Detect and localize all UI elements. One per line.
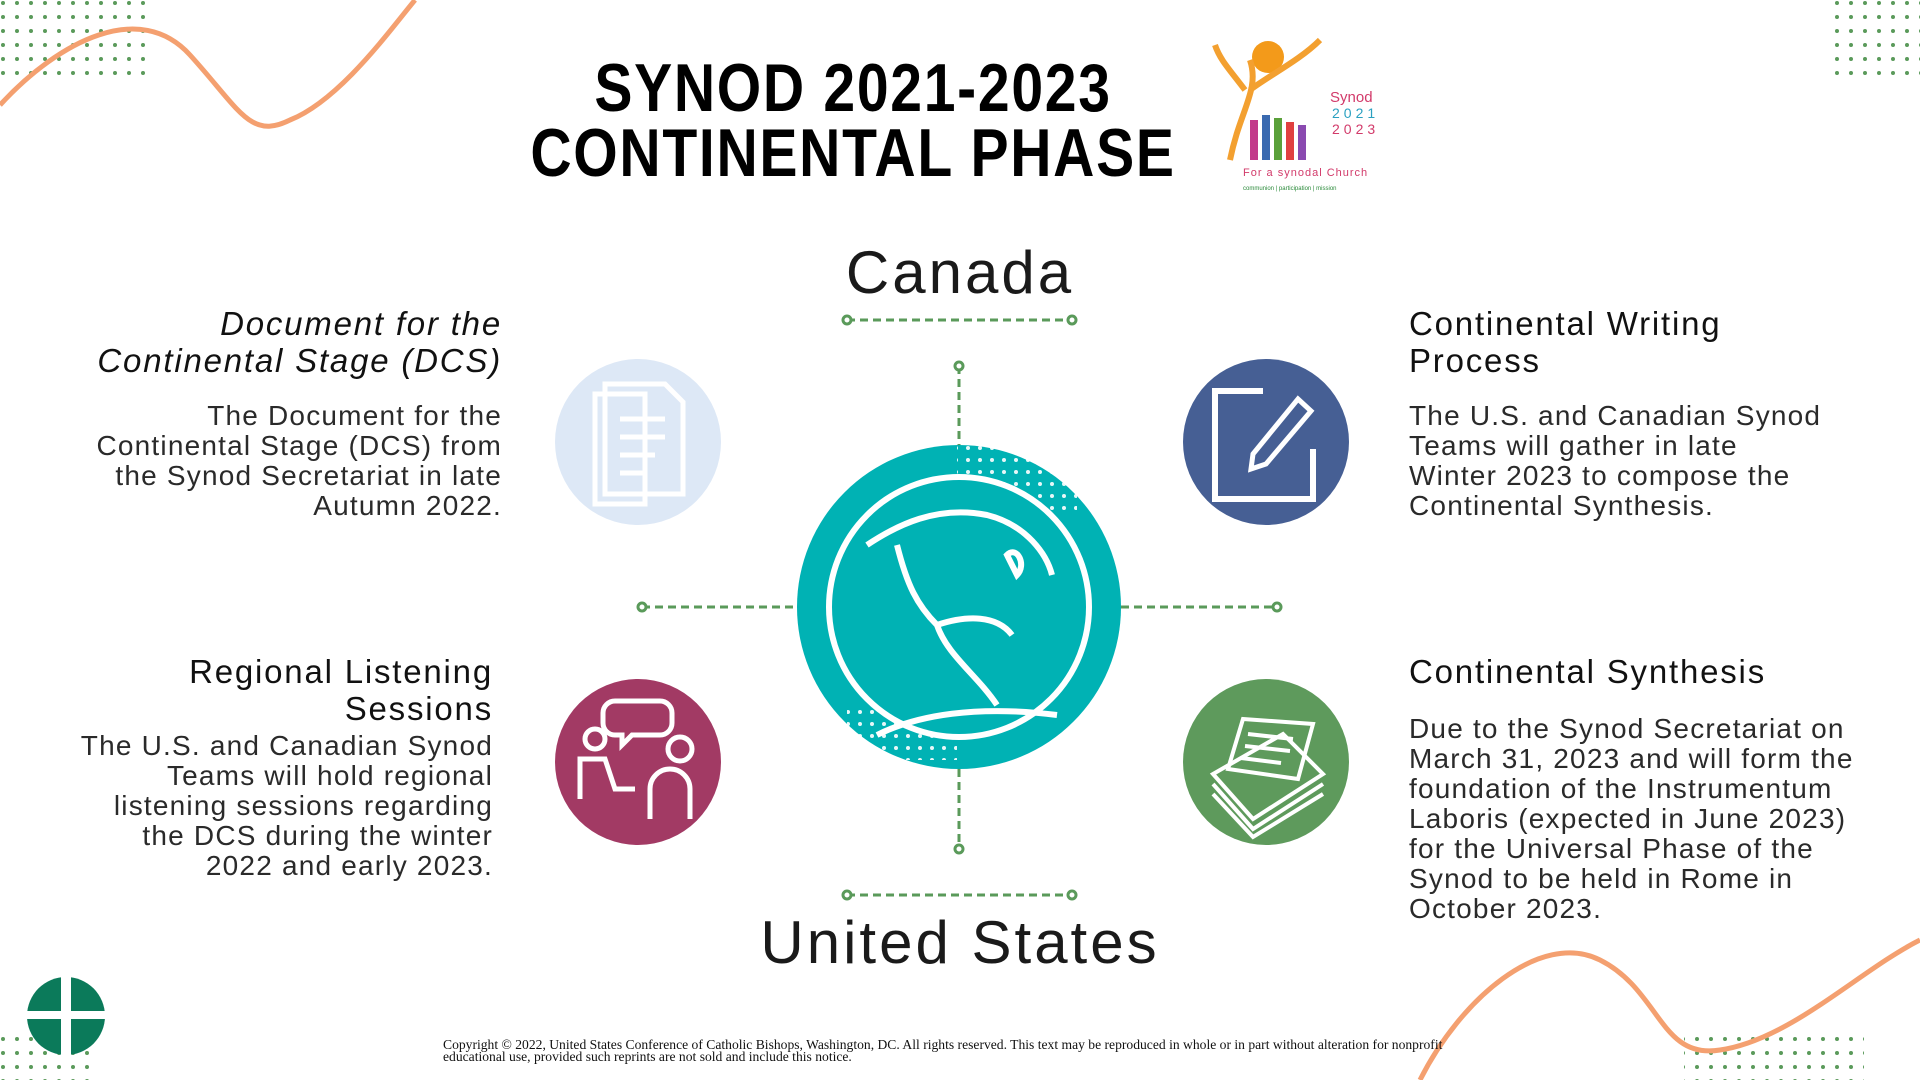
text block: Regional Listening: 2022 and early 2023. <box>206 850 493 881</box>
text block: Continental Writing: Teams will gather in late <box>1409 430 1738 461</box>
icon: listening <box>555 679 721 845</box>
heading: United States: United States <box>760 909 1160 976</box>
text block: Continental Writing: Continental Writing <box>1409 305 1721 342</box>
synod logo: 2021 <box>1332 105 1379 121</box>
text block: Regional Listening <box>81 653 493 881</box>
synod logo: For a synodal Church <box>1243 167 1368 179</box>
text block: Continental Writing: Winter 2023 to compose the <box>1409 460 1790 491</box>
text block: Continental Synthesis: foundation of the Instrumentum <box>1409 773 1833 804</box>
text block: Continental Synthesis: Continental Synthesis <box>1409 653 1766 690</box>
text block: Regional Listening: the DCS during the winter <box>142 820 493 851</box>
text block: Regional Listening: The U.S. and Canadian Synod <box>81 730 493 761</box>
icon: synthesis papers <box>1183 679 1349 845</box>
text block: DCS: The Document for the <box>207 400 502 431</box>
text block: Continental Writing: The U.S. and Canadian Synod <box>1409 400 1821 431</box>
text block: Regional Listening: Sessions <box>345 690 493 727</box>
text block: Continental Writing: Process <box>1409 342 1541 379</box>
text block: Continental Synthesis: Synod to be held in Rome in <box>1409 863 1793 894</box>
text block: Continental Synthesis: for the Universal Phase of the <box>1409 833 1814 864</box>
synod logo: communion | participation | mission <box>1243 186 1336 192</box>
synod logo: Synod <box>1330 89 1373 106</box>
text block: DCS: Continental Stage (DCS) from <box>96 430 502 461</box>
text block: Regional Listening: Teams will hold regional <box>167 760 493 791</box>
title: SYNOD 2021-2023 <box>594 50 1112 126</box>
icon: document <box>555 359 721 525</box>
text block: Regional Listening: Regional Listening <box>189 653 493 690</box>
text block: Regional Listening: listening sessions regarding <box>114 790 493 821</box>
synod logo: 2023 <box>1332 121 1379 137</box>
icon: globe <box>797 445 1121 769</box>
icon: writing <box>1183 359 1349 525</box>
title: CONTINENTAL PHASE <box>530 115 1176 191</box>
text block: DCS: the Synod Secretariat in late <box>115 460 502 491</box>
text block: DCS <box>96 305 502 521</box>
text block: Continental Synthesis: March 31, 2023 and will form the <box>1409 743 1854 774</box>
text block: Continental Writing <box>1409 305 1821 521</box>
text block: DCS: Continental Stage (DCS) <box>97 342 502 379</box>
text block: Continental Synthesis: Laboris (expected in June 2023) <box>1409 803 1846 834</box>
heading: Canada: Canada <box>846 239 1074 306</box>
text block: Continental Synthesis <box>1409 653 1854 924</box>
text block: Continental Synthesis: October 2023. <box>1409 893 1602 924</box>
logo: USCCB <box>27 977 105 1055</box>
title <box>530 50 1176 191</box>
text block: DCS: Document for the <box>220 305 502 342</box>
text block: DCS: Autumn 2022. <box>313 490 502 521</box>
text block: Continental Synthesis: Due to the Synod Secretariat on <box>1409 713 1845 744</box>
text block: Continental Writing: Continental Synthesis. <box>1409 490 1714 521</box>
copyright: Copyright © 2022, United States Conference of Catholic Bishops, Washington, DC. All rights reserved. This text may be reproduced in whole or in part without alteration for nonprofit educational use, provided such reprints are not sold and include this notice. <box>443 1037 1442 1064</box>
synod logo <box>1212 38 1379 192</box>
